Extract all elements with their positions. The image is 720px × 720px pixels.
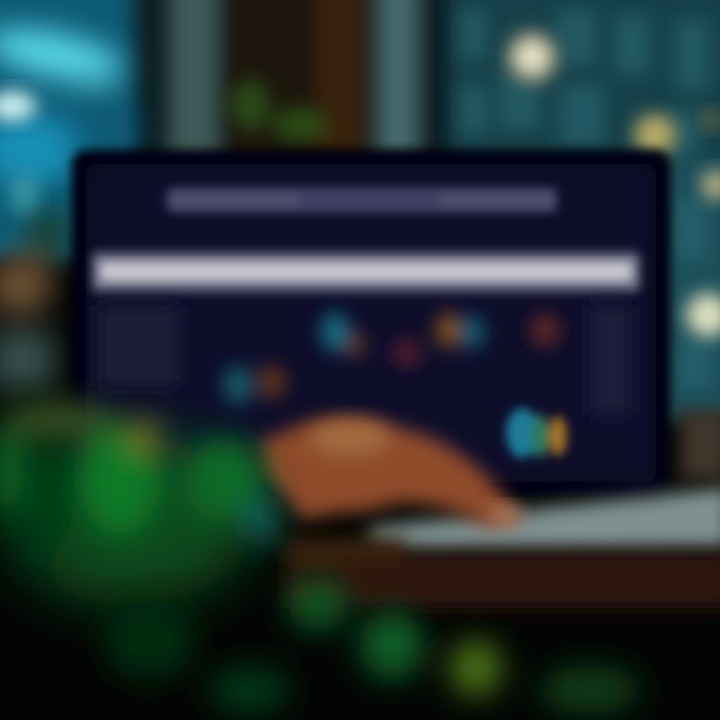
panel: laptop screen: [72, 150, 670, 496]
background: window and wall: [0, 0, 720, 420]
chart: coloured blobs row: [222, 312, 560, 405]
chart: large coloured blob: [506, 408, 567, 458]
text block: left column: [98, 306, 180, 386]
keyboard: [370, 485, 720, 550]
foliage behind the screen: [230, 79, 328, 143]
plant: foreground foliage bottom: [105, 579, 640, 714]
heading: blurred title bar: [167, 188, 557, 212]
hand: [255, 417, 522, 528]
desk: [285, 410, 720, 608]
plant: foreground foliage left: [0, 404, 280, 605]
sky highlights: [0, 19, 130, 185]
icons: bokeh lights: [504, 29, 720, 337]
teal window grid: [460, 10, 710, 390]
left side objects: [0, 209, 66, 390]
text block: right column: [590, 305, 632, 415]
heading: bright subtitle band: [92, 252, 640, 292]
